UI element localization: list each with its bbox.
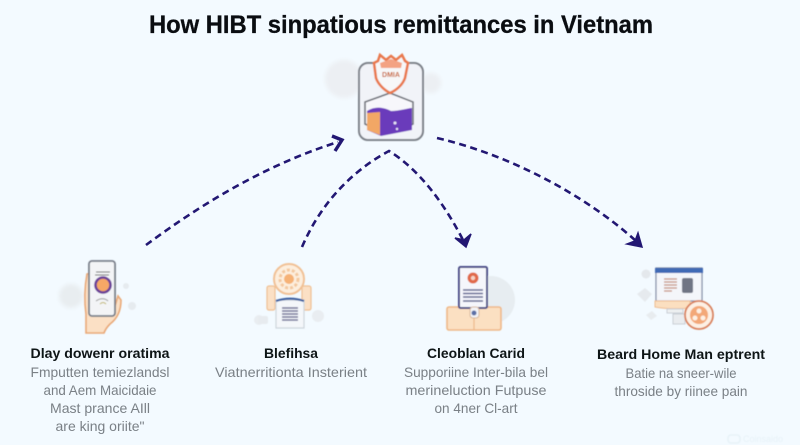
text block: third step: on 4ner Cl-art bbox=[434, 400, 518, 416]
text block: first step: are king oriite" bbox=[56, 418, 145, 434]
text block: second step bbox=[215, 345, 367, 380]
icon: document and card wallet bbox=[447, 267, 515, 330]
watermark: Coinsaido bbox=[743, 434, 783, 444]
text block: fourth step: Batie na sneer-wile bbox=[626, 365, 737, 381]
text block: first step: and Aem Maicidaie bbox=[44, 382, 157, 398]
text block: first step: Fmputten temiezlandsl bbox=[30, 364, 170, 380]
arrow: second step through centre to third step bbox=[302, 151, 471, 247]
arrow: centre to fourth step bbox=[437, 138, 642, 247]
text block: fourth step: throside by riinee pain bbox=[614, 383, 748, 399]
icon: gear and document bbox=[254, 264, 324, 328]
text block: first step bbox=[30, 345, 170, 434]
text block: fourth step bbox=[597, 346, 765, 399]
icon: hand holding phone bbox=[59, 261, 136, 333]
text block: second step: Blefihsa bbox=[264, 345, 318, 361]
text block: second step: Viatnerritionta Insterient bbox=[215, 364, 367, 380]
title: How HIBT sinpatious remittances in Vietnam bbox=[149, 11, 653, 39]
text block: fourth step: Beard Home Man eptrent bbox=[597, 346, 765, 362]
text block: third step: Cleoblan Carid bbox=[427, 345, 525, 361]
text block: third step: Supporiine Inter-bila bel bbox=[404, 364, 548, 380]
icon: central shield and box: DMIA bbox=[382, 72, 400, 79]
text block: third step: merineluction Futpuse bbox=[406, 382, 547, 398]
text block: first step: Dlay dowenr oratima bbox=[30, 345, 170, 361]
icon: monitor with gear badge bbox=[637, 268, 713, 329]
icon: central shield and box bbox=[325, 55, 441, 140]
arrow: first step to centre bbox=[146, 136, 342, 245]
text block: first step: Mast prance AIll bbox=[50, 400, 150, 416]
text block: third step bbox=[404, 345, 548, 416]
